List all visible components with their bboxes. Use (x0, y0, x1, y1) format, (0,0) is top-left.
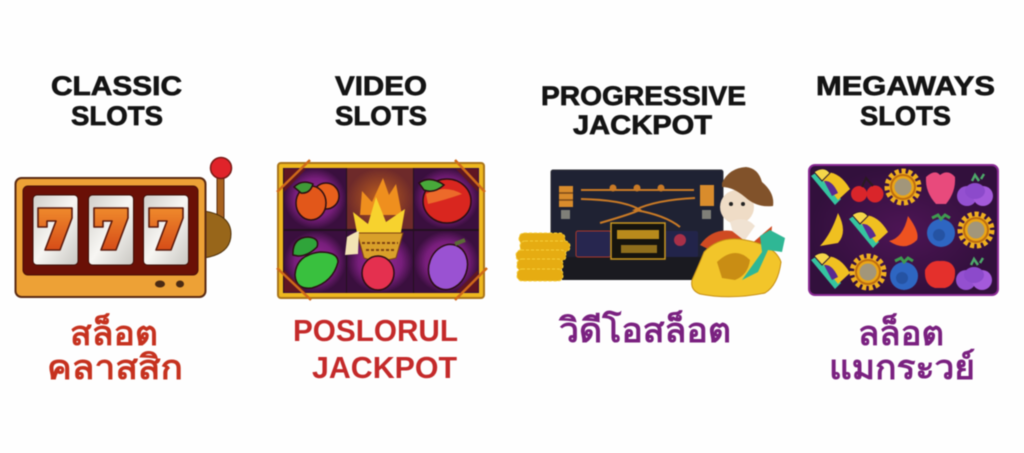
column: megaways slots (809, 71, 998, 387)
grid panel (809, 165, 998, 295)
heading: classic slots: CLASSIC (51, 71, 182, 101)
thai label: megaways slots: ลล็อต (858, 312, 944, 353)
reels with sevens (33, 195, 188, 265)
heading: video slots: SLOTS (335, 101, 427, 131)
dark jackpot screen (551, 170, 723, 262)
yellow money bag (692, 239, 781, 297)
heading: megaways slots: SLOTS (860, 101, 951, 131)
icon: video slot reels with fruit (277, 160, 487, 300)
icon: megaways symbol grid (809, 165, 998, 295)
thai label: megaways slots (829, 312, 975, 387)
base bar (562, 257, 702, 280)
machine body (16, 178, 206, 297)
thai label: classic slots: คลาสสิก (47, 349, 183, 387)
heading: classic slots (51, 71, 182, 131)
heading: progressive jackpot (541, 81, 746, 140)
orange jackpot lines (581, 186, 695, 227)
purple plum (422, 239, 474, 295)
label: poslorul jackpot: POSLORUL (293, 313, 458, 348)
thai label: classic slots: สล็อต (70, 312, 158, 353)
corner ornaments (277, 160, 487, 300)
gold frame (278, 163, 484, 298)
heading: progressive jackpot: PROGRESSIVE (541, 81, 746, 111)
heading: megaways slots: MEGAWAYS (816, 71, 995, 101)
icon: jackpot machine with coins and mascot (516, 167, 785, 297)
heading: video slots: VIDEO (335, 71, 427, 101)
heading: classic slots: SLOTS (71, 101, 163, 131)
row 3 symbols (811, 253, 992, 290)
stack of gold coins (516, 233, 570, 281)
column: classic slots (16, 71, 232, 387)
golden crown with flames (345, 178, 405, 260)
heading: video slots (335, 71, 427, 131)
mascot with hat (700, 167, 773, 255)
pink fruit (362, 256, 394, 290)
teal plant (742, 230, 785, 280)
label: poslorul jackpot: JACKPOT (312, 350, 457, 385)
orange fruit (294, 182, 339, 220)
coin slots (155, 280, 184, 288)
heading: progressive jackpot: JACKPOT (573, 110, 713, 140)
column: progressive jackpot (516, 81, 785, 350)
row 2 symbols (820, 212, 992, 248)
jackpot display boxes (576, 223, 698, 259)
heading: megaways slots (816, 71, 995, 131)
thai label: megaways slots: แมกระวย์ (829, 348, 975, 387)
label: poslorul jackpot (293, 313, 458, 385)
row 1 symbols (811, 169, 993, 206)
green pear (293, 237, 338, 288)
side lights (559, 185, 714, 219)
thai label: classic slots (47, 312, 183, 387)
column: video slots (277, 71, 487, 385)
thai label: progressive jackpot: วิดีโอสล็อต (558, 309, 731, 350)
machine lever (204, 158, 232, 258)
icon: 777 slot machine (16, 158, 232, 297)
red apple (419, 179, 471, 223)
reel cells (283, 168, 479, 293)
